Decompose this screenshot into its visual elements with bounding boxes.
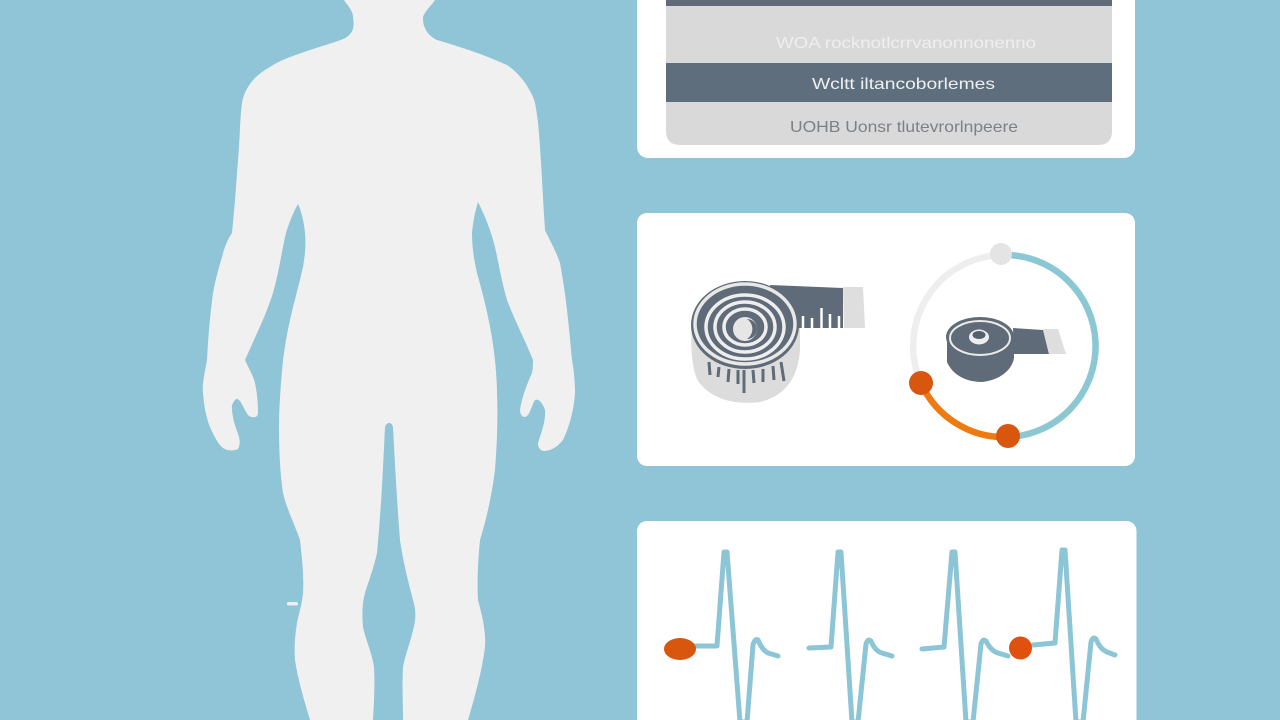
table rows: WOA rocknotlcrrvanonnonenno: [776, 35, 1036, 52]
panel: measurement table: [637, 0, 1135, 158]
panel: pulse chart: [637, 521, 1136, 720]
icon: small tape measure: [946, 317, 1066, 382]
table rows: Wcltt iltancoborlemes: [812, 76, 995, 93]
panel: tape measures: [637, 213, 1135, 466]
chart: ECG lines: [695, 550, 1115, 720]
table rows: UOHB Uonsr tlutevrorlnpeere: [790, 119, 1018, 136]
table rows: [666, 0, 1112, 145]
marker: orange dot right: [1009, 636, 1032, 660]
marker: orange dot left: [664, 638, 696, 660]
body silhouette: [203, 0, 575, 720]
icon: rolled tape measure: [691, 281, 865, 403]
chart: circular progress ring: [909, 243, 1096, 448]
